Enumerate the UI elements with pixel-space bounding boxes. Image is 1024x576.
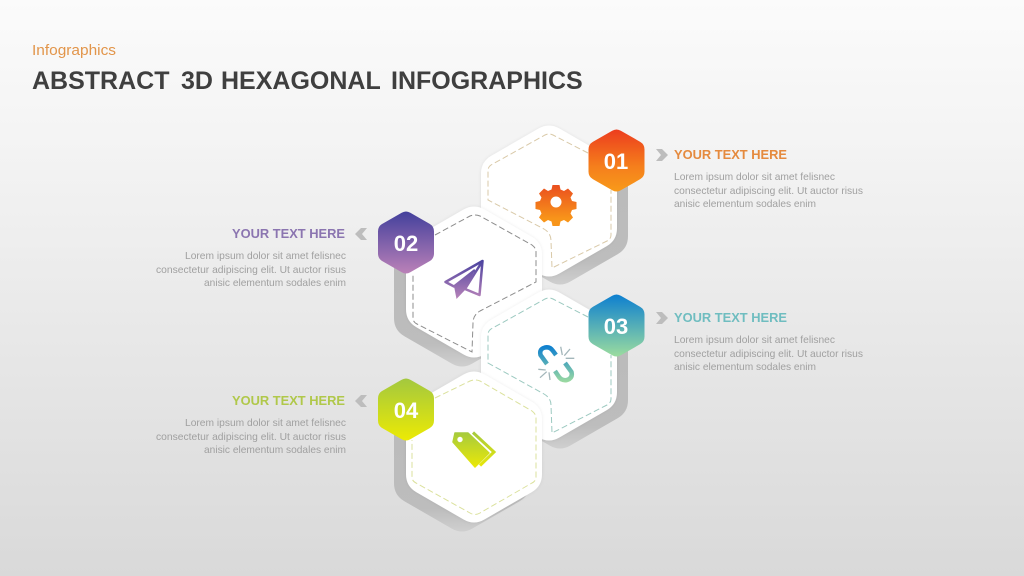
text block 1: anisic elementum sodales enim xyxy=(674,198,816,210)
badge 03 xyxy=(588,294,644,357)
text block 1: Lorem ipsum dolor sit amet felisnec xyxy=(674,171,835,183)
text block 4: anisic elementum sodales enim xyxy=(204,444,346,456)
badge 03: 03 xyxy=(604,314,628,339)
title: ABSTRACT xyxy=(32,67,170,95)
icon: paper plane xyxy=(446,261,482,299)
text block 4: YOUR TEXT HERE xyxy=(232,393,345,408)
badge 04 xyxy=(378,378,434,441)
title: INFOGRAPHICS xyxy=(391,67,583,95)
hexagon 3 xyxy=(481,290,628,448)
title: HEXAGONAL xyxy=(221,67,380,95)
text block 1 xyxy=(674,147,863,210)
text block 4 xyxy=(156,393,346,456)
subtitle: Infographics xyxy=(32,42,116,59)
badge 01: 01 xyxy=(604,149,628,174)
text block 2: anisic elementum sodales enim xyxy=(204,277,346,289)
text block 3: consectetur adipiscing elit. Ut auctor risus xyxy=(674,348,863,360)
text block 3: anisic elementum sodales enim xyxy=(674,361,816,373)
text block 2: consectetur adipiscing elit. Ut auctor risus xyxy=(156,264,346,276)
badge 02: 02 xyxy=(394,231,418,256)
badge 01 xyxy=(588,129,644,192)
icon: price tags xyxy=(453,432,494,467)
badge 02 xyxy=(378,211,434,274)
icon: gear xyxy=(536,185,576,226)
arrow 1 xyxy=(656,149,668,161)
arrow 4 xyxy=(355,395,367,407)
text block 3 xyxy=(674,310,863,373)
hexagon 1 xyxy=(481,126,628,284)
text block 3: Lorem ipsum dolor sit amet felisnec xyxy=(674,334,835,346)
icon: broken link xyxy=(538,347,574,380)
text block 3: YOUR TEXT HERE xyxy=(674,310,787,325)
text block 1: YOUR TEXT HERE xyxy=(674,147,787,162)
text block 2 xyxy=(156,226,346,289)
badge 04: 04 xyxy=(394,398,419,423)
text block 4: Lorem ipsum dolor sit amet felisnec xyxy=(185,417,346,429)
text block 2: YOUR TEXT HERE xyxy=(232,226,345,241)
arrow 2 xyxy=(355,228,367,240)
text block 1: consectetur adipiscing elit. Ut auctor risus xyxy=(674,185,863,197)
hexagon 2 xyxy=(394,206,542,366)
text block 4: consectetur adipiscing elit. Ut auctor risus xyxy=(156,431,346,443)
text block 2: Lorem ipsum dolor sit amet felisnec xyxy=(185,250,346,262)
title: 3D xyxy=(181,67,213,95)
hexagon 4 xyxy=(394,372,542,532)
arrow 3 xyxy=(656,312,668,324)
